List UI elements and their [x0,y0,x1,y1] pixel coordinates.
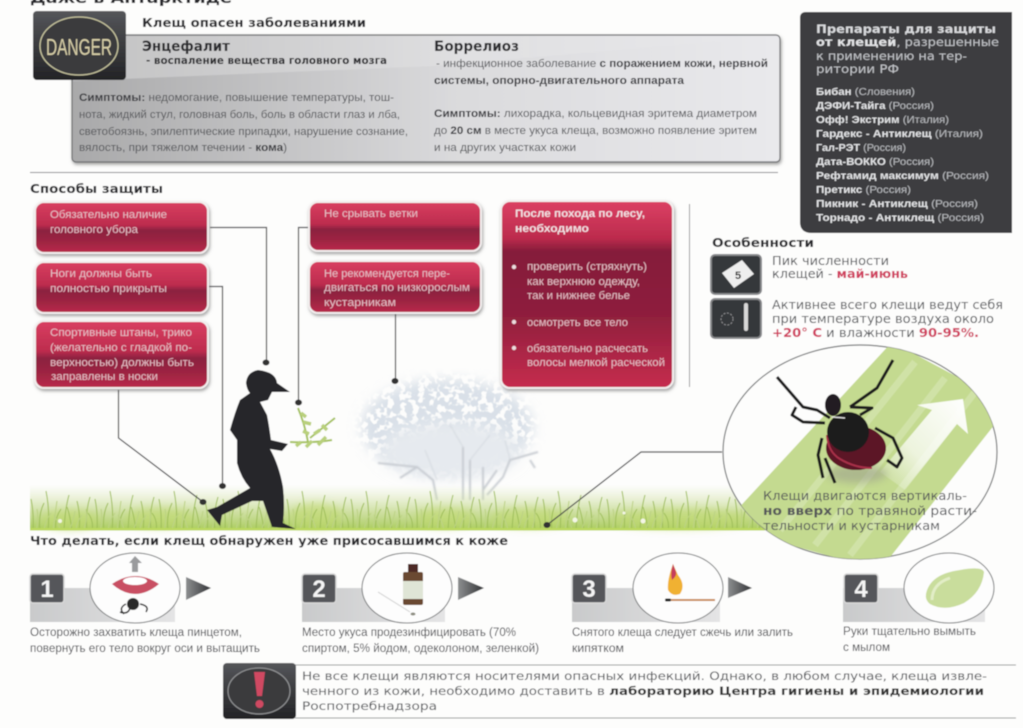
step 2 caption [302,627,539,655]
tip box: trousers: заправлены в носки [51,371,158,383]
tip box: covered legs [35,262,208,313]
callout text [763,489,977,533]
step 3 caption: Снятого клеща следует сжечь или залить [572,627,793,639]
repellents list: Дата-ВОККО (Россия) [816,156,934,168]
number badge 3: 3 [582,576,596,603]
heading: protection methods: Способы защиты [30,182,163,196]
tip box: headwear: головного убора [50,224,139,236]
arrow [186,577,211,600]
text: temperature and humidity: при температуре воздуха около [772,312,994,326]
repellents heading: ритории РФ [816,62,899,76]
tip box: after forest walk: проверить (стряхнуть) [527,261,647,273]
repellents list: Рефтамид максимум (Россия) [816,170,989,182]
step 4 caption: Руки тщательно вымыть [843,626,976,638]
icon: tick rotation [90,553,180,623]
tip box: covered legs: полностью прикрыты [50,283,167,295]
heading: what to do: Что делать, если клещ обнаружен уже присосавшимся к коже [30,534,508,548]
repellents heading: от клещей , разрешенные [816,35,999,49]
callout text: Клещи двигаются вертикаль- [763,489,967,503]
icon: exclamation mark [223,663,296,719]
tip box: after forest walk: необходимо [515,223,589,235]
repellents list: Гардекс - Антиклещ (Италия) [816,128,983,140]
repellents list: Торнадо - Антиклещ (Россия) [816,212,984,224]
bright grass patches [40,503,750,530]
warning note [223,663,1016,719]
step 3 caption [572,627,793,655]
illustration: pale tree [361,379,538,500]
encephalitis symptoms: светобоязнь, эпилептические припадки, нарушение сознание, [79,126,408,138]
arrow [728,577,752,598]
borreliosis symptoms: и на других участках кожи [434,142,576,154]
icon: tick [777,360,902,483]
icon: calendar: 5 [735,270,741,282]
repellents list: Пикник - Антиклещ (Россия) [816,198,978,210]
tip box: branches: Не срывать ветки [324,208,418,220]
tip box: trousers [35,321,208,388]
text: temperature and humidity: +20° С и влажности 90-95%. [772,326,979,340]
text: peak months [772,254,908,281]
borreliosis symptoms: до 20 см в месте укуса клеща, возможно появление эритем [434,125,757,137]
tip box: after forest walk: так и нижнее белье [527,290,630,302]
warning text [302,669,987,713]
repellents list [816,86,989,224]
icon: soap [904,553,994,623]
warning text: ченного из кожи, необходимо доставить в лабораторию Центра гигиены и эпидемиологии [302,684,984,698]
tip box: shrubs: двигаться по низкорослым [324,282,470,294]
tip box: trousers: Спортивные штаны, трико [50,327,192,339]
white arrow [880,399,968,490]
borreliosis title: Боррелиоз [434,39,519,55]
tip box: after forest walk: как верхнюю одежду, [527,276,640,288]
icon: antiseptic bottle [362,553,452,623]
tip box: after forest walk: волосы мелкой расческой [527,357,665,369]
borreliosis symptoms: Симптомы: лихорадка, кольцевидная эритема диаметром [434,108,757,120]
grass blade [741,346,994,560]
encephalitis symptoms: вялость, при тяжелом течении - кома) [79,142,287,154]
repellents list: Бибан (Словения) [816,86,915,98]
step 1 [30,553,260,655]
tip box: covered legs: Ноги должны быть [50,268,152,280]
icon: calendar [711,255,761,294]
step 2 caption: спиртом, 5% йодом, одеколоном, зеленкой) [302,643,539,655]
borreliosis description: - инфекционное заболевание с поражением кожи, нервной [436,58,768,70]
step 4 caption [843,626,976,654]
tip box: after forest walk: После похода по лесу, [515,208,645,220]
repellents list: Офф! Экстрим (Италия) [816,114,949,126]
tip box: headwear: Обязательно наличие [50,209,167,221]
repellents list: Гал-РЭТ (Россия) [816,142,906,154]
step 3 [572,553,793,655]
tip box: trousers: (желательно с гладкой по- [50,342,192,354]
icon: burning match [633,553,723,623]
illustration: boy silhouette [207,370,296,529]
step 1 caption: повернуть его тело вокруг оси и вытащить [30,643,260,655]
step 4 [843,553,994,654]
repellents list: ДЭФИ-Тайга (Россия) [816,100,934,112]
text: peak months: клещей - май-июнь [772,267,908,281]
callout: tick on grass blade [722,342,1010,570]
repellents heading: к применению на тер- [816,49,967,63]
heading: features: Особенности [712,236,814,250]
icon: danger badge [33,11,126,80]
panel: repellents [800,12,1012,233]
borreliosis description [434,58,768,87]
encephalitis symptoms: нота, жидкий стул, головная боль, боль в области глаз и лба, [79,109,400,121]
tip box: trousers: верхностью) должны быть [50,357,194,369]
warning text: Роспотребнадзора [302,699,437,713]
step 3 caption: кипятком [572,643,624,655]
step 1 caption [30,627,260,655]
number badge 2 [302,574,336,603]
icon: sun and thermometer [711,299,761,338]
tip box: after forest walk: обязательно расчесать [527,343,648,355]
connector lines with dots [118,228,722,528]
number badge 4: 4 [854,576,868,603]
encephalitis symptoms [79,92,408,154]
icon: danger badge: DANGER [46,34,112,60]
tip box: branches [309,202,481,251]
tip box: shrubs: кустарникам [324,297,396,309]
repellents list: Претикс (Россия) [816,184,911,196]
borreliosis symptoms [434,108,757,154]
step 4 caption: с мылом [843,642,890,654]
panel background [72,35,780,162]
step 2 [302,553,539,655]
tip box: shrubs: Не рекомендуется пере- [324,268,450,280]
step 1 caption: Осторожно захватить клеща пинцетом, [30,627,242,639]
text: temperature and humidity: Активнее всего клещи ведут себя [772,298,1003,312]
text: peak months: Пик численности [772,254,889,268]
tip box: after forest walk: осмотреть все тело [527,317,628,329]
callout text: тельности и кустарникам [763,519,940,533]
callout text: но вверх по травяной расти- [763,504,977,518]
panel: diseases [33,11,780,162]
illustration: plant branch [290,408,335,447]
scene: grass strip [30,485,765,530]
warning text: Не все клещи являются носителями опасных инфекций. Однако, в любом случае, клеща извле- [302,669,987,683]
repellents heading [816,22,999,76]
tip box: shrubs [309,261,481,313]
tip box: headwear [35,202,208,253]
encephalitis title: Энцефалит [142,39,231,55]
number badge 4 [844,574,878,603]
number badge 3 [572,574,606,603]
number badge 2: 2 [312,576,326,603]
arrow [458,577,484,600]
text: temperature and humidity [772,298,1003,340]
heading: danger of diseases: Клещ опасен заболеваниями [142,16,366,30]
encephalitis description: - воспаление вещества головного мозга [146,55,387,67]
borreliosis description: системы, опорно-двигательного аппарата [434,75,685,87]
step 2 caption: Место укуса продезинфицировать (70% [302,627,516,639]
number badge 1 [30,574,64,603]
repellents heading: Препараты для защиты [816,22,996,36]
tip box: after forest walk [501,201,673,388]
number badge 1: 1 [40,576,54,603]
panel background [800,12,1012,233]
encephalitis symptoms: Симптомы: недомогание, повышение температуры, тош- [79,92,394,104]
